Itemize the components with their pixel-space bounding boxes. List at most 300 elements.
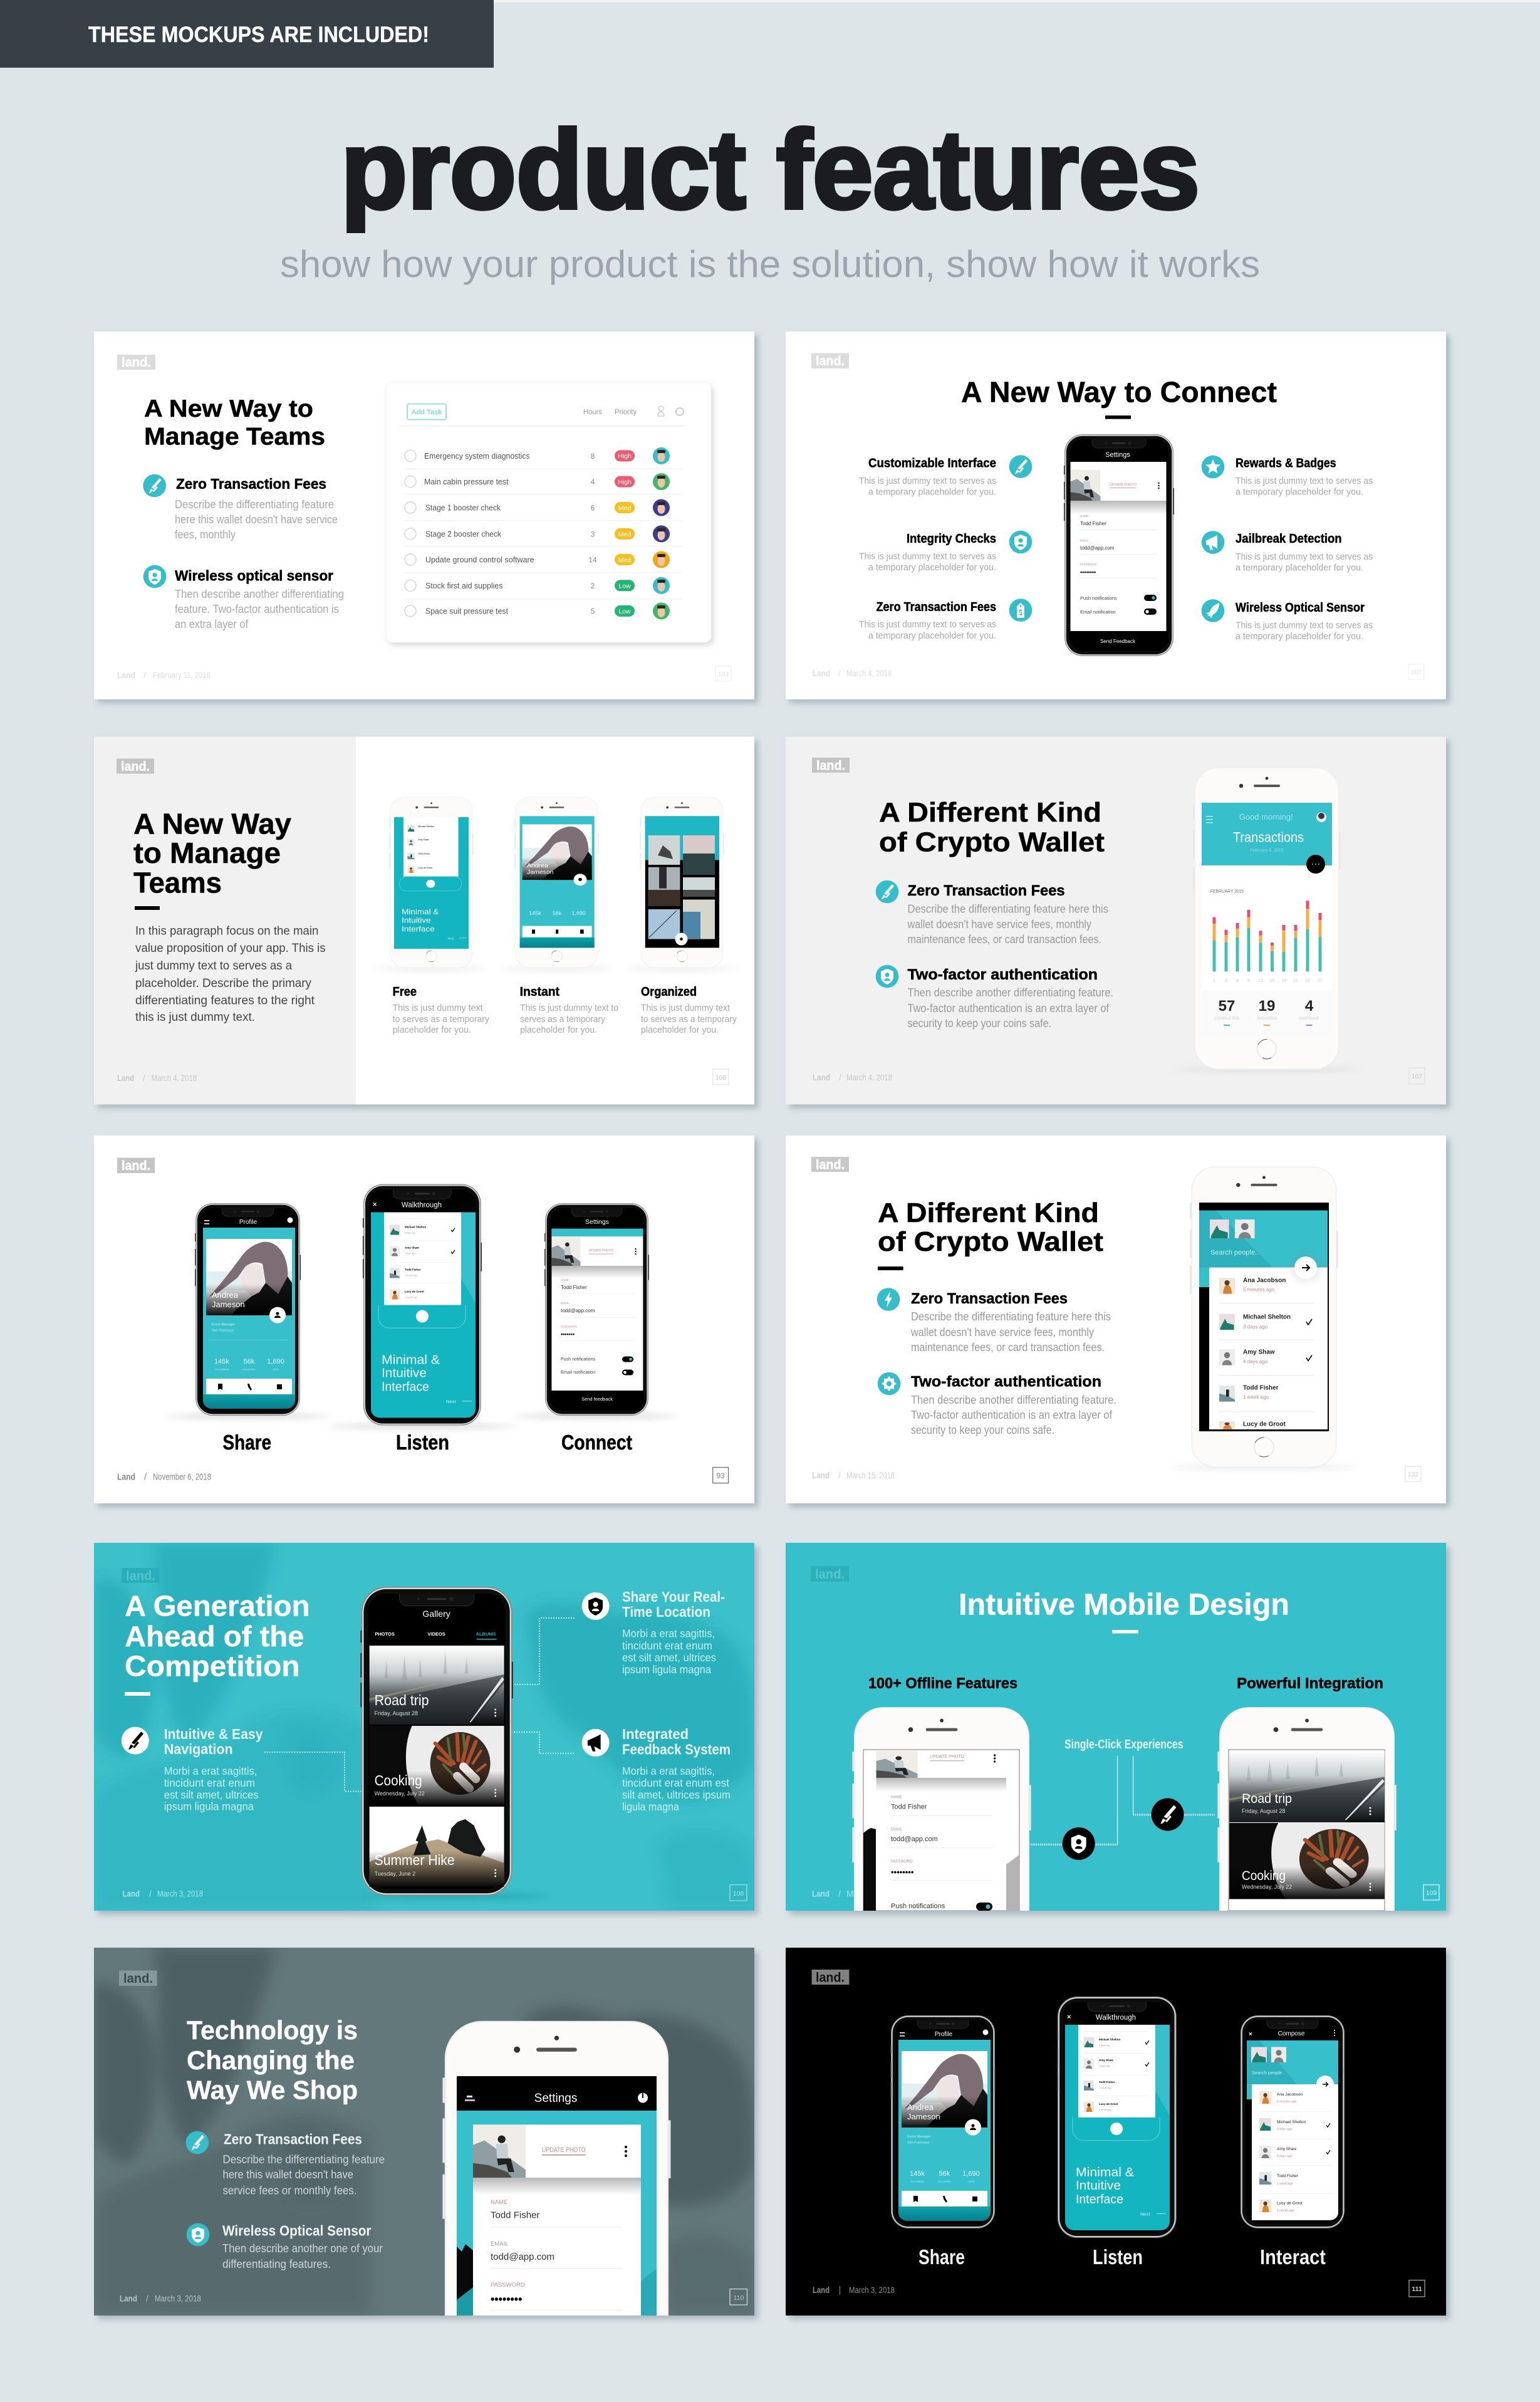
feature: zero transaction fees: maintenance fees, or card transaction fees. xyxy=(911,1341,1105,1354)
heading: to Manage xyxy=(133,837,281,869)
phone: profile: FOLLOWERS xyxy=(910,2181,925,2183)
phone: compose: × xyxy=(1249,2031,1252,2038)
bar chart: 15 xyxy=(1270,979,1274,983)
task rows: High xyxy=(618,479,632,486)
right features: This is just dummy text to serves as xyxy=(1236,552,1373,562)
panel: slide 2 a new way to connect xyxy=(786,332,1450,703)
phone: settings: Settings xyxy=(1105,451,1130,459)
phone: profile: Profile xyxy=(935,2031,953,2038)
feature: share your real-time location xyxy=(582,1589,725,1676)
feature: integrated feedback system xyxy=(582,1726,731,1813)
phone: gallery: ALBUMS xyxy=(476,1631,496,1637)
phone shadows xyxy=(166,1414,678,1428)
feature: zero transaction fees xyxy=(877,1288,1111,1354)
phone: walkthrough: 4 days ago xyxy=(1099,2065,1110,2067)
panel: slide 7 a generation ahead xyxy=(94,1543,758,1915)
feature labels: Share xyxy=(918,2245,965,2269)
left features: a temporary placeholder for you. xyxy=(868,563,996,573)
heading: A New Way to xyxy=(144,395,313,422)
phone: settings: Email notification xyxy=(1080,609,1116,615)
feature: integrated feedback system: tincidunt erat enum est xyxy=(622,1777,729,1789)
phone: compose: 4 days ago xyxy=(1277,2154,1293,2158)
right features: a temporary placeholder for you. xyxy=(1236,563,1363,573)
feature: two-factor authentication: Two-factor authentication xyxy=(911,1374,1101,1390)
phone: instant: Jameson xyxy=(527,869,554,876)
feature: share your real-time location: tincidunt erat enum xyxy=(622,1639,712,1652)
badge: these mockups are included xyxy=(0,0,494,68)
phone: walkthrough: Michael Shelton xyxy=(1099,2038,1121,2041)
column headings: Powerful Integration xyxy=(1237,1675,1383,1692)
feature labels: This is just dummy text xyxy=(393,1003,482,1013)
heading: of Crypto Wallet xyxy=(879,827,1105,857)
footer: Land xyxy=(117,1471,135,1483)
feature: zero transaction fees: Zero Transaction Fees xyxy=(224,2131,362,2147)
feature labels: Connect xyxy=(561,1431,632,1454)
heading: A Different Kind xyxy=(879,797,1101,828)
title: product features xyxy=(341,107,1200,232)
phone: profile: 1,690 xyxy=(267,1358,284,1365)
logo: land. xyxy=(123,1971,153,1986)
phone: transactions chart: FEBRUARY 2015 xyxy=(1210,889,1244,894)
bar chart: 1 xyxy=(1213,979,1215,983)
panel: slide 5 share listen connect xyxy=(94,1136,758,1507)
footer left: Land xyxy=(812,1889,830,1899)
heading xyxy=(879,797,1105,857)
feature: two-factor authentication: Two-factor authentication xyxy=(907,966,1098,983)
phone: settings: •••••••• xyxy=(1080,569,1096,575)
task rows: Med xyxy=(618,531,631,538)
phone: compose: Amy Shaw xyxy=(1277,2147,1296,2151)
heading: Intuitive Mobile Design xyxy=(959,1588,1289,1622)
single-click experiences label: Single-Click Experiences xyxy=(1064,1738,1184,1752)
heading: Technology is xyxy=(187,2015,358,2045)
top edge strip xyxy=(0,0,1540,3)
phone: gallery: Road trip xyxy=(1242,1792,1292,1806)
phone: profile: Andrea xyxy=(907,2102,934,2112)
footer: / xyxy=(838,1470,841,1480)
footer: 107 xyxy=(1411,669,1422,676)
heading xyxy=(878,1198,1103,1270)
bar chart: 24 xyxy=(1305,979,1310,983)
logo: land. xyxy=(816,354,845,368)
heading: A Different Kind xyxy=(878,1198,1099,1228)
phone: instant xyxy=(514,797,599,968)
phone: walkthrough: 1 month ago xyxy=(1099,2087,1111,2089)
phone: settings: EMAIL xyxy=(1080,539,1089,542)
feature: zero transaction fees xyxy=(876,880,1108,946)
heading: Ahead of the xyxy=(125,1620,304,1653)
phone: settings xyxy=(442,2020,670,2316)
phone: walkthrough: Next xyxy=(446,1399,456,1404)
feature labels: Free xyxy=(393,985,417,999)
phone: profile: 1,690 xyxy=(962,2170,980,2178)
task rows: Space suit pressure test xyxy=(425,607,508,615)
task rows: 3 xyxy=(591,530,595,539)
feature: zero transaction fees: Zero Transaction Fees xyxy=(907,882,1065,899)
feature: intuitive & easy navigation: Navigation xyxy=(164,1741,233,1757)
phone: walkthrough xyxy=(1057,1997,1177,2238)
table header: Priority xyxy=(615,407,637,416)
phone: settings: Todd Fisher xyxy=(891,1804,927,1811)
phone: walkthrough: Amy Shaw xyxy=(405,1246,419,1250)
footer: / xyxy=(146,2294,148,2304)
phone: profile: FOLLOWERS xyxy=(215,1369,229,1371)
phone: transactions chart: February 6, 2015 xyxy=(1250,849,1284,853)
footer: 103 xyxy=(718,671,729,678)
phone: settings: todd@app.com xyxy=(891,1835,938,1843)
right features: a temporary placeholder for you. xyxy=(1236,632,1363,642)
feature: intuitive & easy navigation: Intuitive & Easy xyxy=(164,1726,263,1742)
phone: compose: 1 week ago xyxy=(1243,1394,1269,1400)
phone: compose: Todd Fisher xyxy=(1243,1385,1279,1391)
phone: profile: 145k xyxy=(214,1358,229,1365)
footer: March 3, 2018 xyxy=(157,1889,203,1899)
connector: left xyxy=(1031,1756,1118,1860)
phone: compose: 5 minutes ago xyxy=(1277,2100,1297,2104)
add task button xyxy=(407,404,446,420)
right features xyxy=(1202,456,1373,642)
task card xyxy=(386,382,714,645)
phone: settings: Todd Fisher xyxy=(561,1285,587,1290)
phone: settings: Settings xyxy=(585,1218,609,1226)
feature: zero transaction fees: Describe the differentiating feature here this xyxy=(907,902,1108,915)
phone: walkthrough: 5 days ago xyxy=(1099,2044,1110,2047)
page number xyxy=(1423,1885,1439,1900)
phone: instant: 1,690 xyxy=(571,911,586,916)
stats: SNOOZED xyxy=(1257,1016,1277,1021)
feature: zero transaction fees: Describe the differentiating feature here this xyxy=(911,1310,1111,1323)
phone: settings: Email notification xyxy=(561,1369,595,1375)
phone: profile: Event Manager xyxy=(907,2135,930,2139)
phone: profile: Jameson xyxy=(212,1300,245,1309)
feature: two-factor authentication: security to keep your coins safe. xyxy=(907,1017,1051,1030)
phone: compose: Search people.. xyxy=(1252,2070,1285,2076)
feature: wireless optical sensor xyxy=(187,2222,383,2270)
phone: free: Minimal & xyxy=(402,907,439,916)
phone: gallery: Summer Hike xyxy=(375,1852,455,1868)
phone: walkthrough: 1 month ago xyxy=(405,1296,417,1298)
phone: settings: EMAIL xyxy=(561,1302,570,1305)
phone: transactions chart: Transactions xyxy=(1233,830,1304,845)
footer: / xyxy=(839,1072,841,1082)
bar chart: 3 xyxy=(1225,979,1227,983)
phone: walkthrough: Amy Shaw xyxy=(1099,2059,1113,2062)
feature: zero transaction fees: wallet doesn't have service fees, monthly xyxy=(907,918,1091,931)
phone: free: Amy Shaw xyxy=(418,838,429,841)
phone: free: Lucy de Groot xyxy=(418,867,432,869)
phone: settings: Settings xyxy=(534,2092,577,2105)
phone: profile xyxy=(195,1203,301,1416)
feature labels: This is just dummy text xyxy=(641,1003,730,1013)
footer: November 6, 2018 xyxy=(153,1471,211,1483)
bar chart: 27 xyxy=(1318,979,1323,983)
column headings xyxy=(868,1675,1383,1692)
phone: settings: Push notifications xyxy=(891,1903,945,1910)
feature: share your real-time location: est silt amet, ultrices xyxy=(622,1651,716,1664)
footer: 107 xyxy=(1412,1073,1422,1080)
footer: March 15, 2018 xyxy=(846,1470,895,1480)
feature: two-factor authentication: Then describe another differentiating feature. xyxy=(911,1394,1116,1406)
phone: walkthrough: Minimal & xyxy=(1076,2166,1135,2180)
feature: two-factor authentication: Two-factor authentication is an extra layer of xyxy=(911,1409,1113,1421)
connector: right xyxy=(1133,1756,1215,1831)
feature: wireless optical sensor: Then describe another one of your xyxy=(222,2242,383,2255)
footer: Land xyxy=(812,1470,830,1480)
feature labels: serves as a temporary xyxy=(520,1015,606,1025)
panel: slide 4 crypto wallet transactions xyxy=(786,737,1450,1108)
footer: 110 xyxy=(734,2294,744,2302)
logo: land. xyxy=(816,1970,845,1985)
phone: compose: Ana Jacobson xyxy=(1243,1277,1286,1284)
footer xyxy=(117,1468,729,1483)
feature: intuitive & easy navigation: tincidunt erat enum xyxy=(164,1777,255,1789)
table header: Hours xyxy=(583,407,602,416)
footer: March 4, 2018 xyxy=(152,1073,197,1083)
phone: walkthrough: Intuitive xyxy=(382,1366,427,1380)
phone: profile: FOLLOWING xyxy=(242,1369,256,1371)
task rows: 2 xyxy=(591,582,595,590)
phone: compose: Ana Jacobson xyxy=(1277,2092,1303,2097)
heading: Teams xyxy=(133,867,222,899)
feature: share your real-time location: Share Your Real- xyxy=(622,1589,725,1605)
feature: integrated feedback system: Integrated xyxy=(622,1726,689,1742)
task rows: Low xyxy=(618,608,631,615)
phone: instant: 145k xyxy=(529,911,541,916)
feature: zero transaction fees: Zero Transaction Fees xyxy=(176,476,326,492)
task rows: 4 xyxy=(591,478,595,486)
phone: compose xyxy=(1170,1167,1358,1468)
phone: walkthrough: Next xyxy=(1140,2211,1150,2217)
task rows: Med xyxy=(618,556,631,564)
footer left: / xyxy=(838,1889,841,1899)
feature labels: This is just dummy text to xyxy=(520,1003,618,1013)
feature: wireless optical sensor: differentiating features. xyxy=(222,2258,331,2270)
paragraph: just dummy text to serves as a xyxy=(135,959,292,973)
phone: settings xyxy=(544,1203,649,1416)
heading: A New Way to Connect xyxy=(961,375,1277,408)
phone: gallery xyxy=(1217,1707,1397,1911)
phone: walkthrough: Intuitive xyxy=(1076,2179,1121,2193)
bar chart: 4 xyxy=(1236,979,1239,983)
phone: settings: Todd Fisher xyxy=(491,2210,539,2220)
phone: profile: LIKES xyxy=(968,2181,975,2183)
add task button: Add Task xyxy=(412,409,442,416)
phone: profile: 145k xyxy=(910,2170,925,2178)
heading xyxy=(187,2015,358,2104)
bar chart: 21 xyxy=(1293,979,1298,983)
phone: compose: Lucy de Groot xyxy=(1243,1421,1286,1428)
panel: slide 9 technology is changing xyxy=(94,1948,761,2322)
phone: settings: PASSWORD xyxy=(561,1325,578,1329)
feature: wireless optical sensor: feature. Two-factor authentication is xyxy=(175,603,339,615)
feature labels: Instant xyxy=(520,985,559,999)
phone: profile: San Francisco xyxy=(212,1329,234,1332)
feature: intuitive & easy navigation: Morbi a erat sagittis, xyxy=(164,1765,257,1777)
left features: a temporary placeholder for you. xyxy=(868,488,996,498)
feature labels: Share xyxy=(223,1431,271,1454)
phone: settings: NAME xyxy=(491,2199,507,2206)
feature: intuitive & easy navigation: ipsum ligula magna xyxy=(164,1800,254,1812)
phone: walkthrough: Todd Fisher xyxy=(405,1268,421,1271)
heading xyxy=(125,1589,310,1696)
feature: two-factor authentication xyxy=(878,1372,1116,1436)
paragraph xyxy=(135,924,326,1024)
phone: gallery: Gallery xyxy=(422,1609,450,1619)
phone: profile: Jameson xyxy=(907,2112,940,2121)
phone: settings: NAME xyxy=(891,1796,902,1800)
footer: Land xyxy=(813,668,830,678)
footer: 108 xyxy=(733,1890,744,1898)
phone: settings xyxy=(852,1707,1031,1911)
task rows xyxy=(404,447,682,619)
stats xyxy=(1202,990,1332,1035)
footer xyxy=(117,1069,729,1085)
phone: transactions chart xyxy=(1173,768,1361,1071)
phone: settings: todd@app.com xyxy=(491,2252,554,2262)
paragraph: this is just dummy text. xyxy=(135,1010,255,1024)
right features: a temporary placeholder for you. xyxy=(1236,488,1363,498)
phone: walkthrough: Todd Fisher xyxy=(1099,2081,1115,2084)
phone: settings: PASSWORD xyxy=(891,1860,913,1864)
right features: This is just dummy text to serves as xyxy=(1236,476,1373,486)
task rows: Stage 1 booster check xyxy=(425,503,501,513)
feature: two-factor authentication: Then describe another differentiating feature. xyxy=(907,986,1113,999)
phone: walkthrough: Interface xyxy=(382,1380,429,1394)
feature labels: to serves as a temporary xyxy=(641,1015,737,1025)
phone: settings: ••••••• xyxy=(561,1331,575,1337)
phone: free: Interface xyxy=(402,924,435,933)
footer: 106 xyxy=(715,1074,726,1082)
phone: gallery: Road trip xyxy=(375,1692,429,1708)
footer: / xyxy=(838,668,841,678)
footer: Land xyxy=(813,2285,830,2295)
phone: free: Intuitive xyxy=(402,916,431,924)
feature: share your real-time location: Morbi a erat sagittis, xyxy=(622,1627,715,1640)
footer: March 4, 2018 xyxy=(846,668,892,678)
feature: zero transaction fees: Describe the differentiating feature xyxy=(223,2153,385,2166)
phone: instant: Andrea xyxy=(527,862,548,869)
phone: settings: •••••••• xyxy=(491,2293,522,2305)
phone: compose: 3 days ago xyxy=(1277,2128,1293,2131)
phone: compose: Amy Shaw xyxy=(1243,1349,1275,1356)
footer: February 11, 2018 xyxy=(153,670,211,680)
left features: Zero Transaction Fees xyxy=(876,600,996,614)
phone: settings: UPDATE PHOTO xyxy=(1110,483,1137,487)
phone: settings: UPDATE PHOTO xyxy=(930,1755,965,1759)
feature labels xyxy=(393,985,737,1035)
heading xyxy=(144,395,325,450)
footer xyxy=(813,664,1424,679)
subtitle: show how your product is the solution, show how it works xyxy=(280,243,1260,285)
footer: / xyxy=(143,670,146,680)
feature labels: to serves as a temporary xyxy=(393,1015,490,1025)
phone: instant: 56k xyxy=(553,911,562,916)
phone: compose: Michael Shelton xyxy=(1243,1314,1291,1321)
phone: walkthrough: 4 days ago xyxy=(405,1252,416,1255)
feature: wireless optical sensor: Wireless Optical Sensor xyxy=(222,2222,372,2238)
heading: A Generation xyxy=(125,1589,310,1622)
panel: slide 8 intuitive mobile design xyxy=(786,1543,1453,1918)
task rows: High xyxy=(618,452,632,460)
feature labels: placeholder for you. xyxy=(641,1025,719,1035)
phone: compose: Michael Shelton xyxy=(1277,2120,1306,2124)
phone: gallery: Friday, August 28 xyxy=(1242,1808,1285,1814)
task rows: Stage 2 booster check xyxy=(425,529,501,539)
footer xyxy=(812,1466,1421,1481)
phone: profile: San Francisco xyxy=(907,2141,929,2144)
table header xyxy=(583,406,684,416)
task rows: Low xyxy=(618,583,631,590)
feature: zero transaction fees: Zero Transaction Fees xyxy=(911,1290,1068,1307)
footer xyxy=(120,2289,747,2305)
stats: 57 xyxy=(1219,998,1235,1015)
phone: settings: PASSWORD xyxy=(491,2282,525,2289)
logo: land. xyxy=(121,760,150,774)
left features: This is just dummy text to serves as xyxy=(859,551,996,561)
left features: This is just dummy text to serves as xyxy=(859,620,996,630)
panel: slide 3 a new way to manage teams xyxy=(94,737,758,1108)
footer: / xyxy=(144,1471,147,1483)
feature: intuitive & easy navigation: est silt amet, ultrices xyxy=(164,1788,259,1801)
phone: walkthrough: × xyxy=(1067,2013,1071,2021)
phone: compose: 5 minutes ago xyxy=(1243,1287,1275,1293)
phone: walkthrough: 1 month ago xyxy=(405,1275,417,1277)
left features: Customizable Interface xyxy=(868,457,996,471)
bar chart: 9 xyxy=(1247,979,1250,983)
phone: settings: Todd Fisher xyxy=(1080,521,1106,526)
phone: organized xyxy=(640,797,724,968)
feature labels: placeholder for you. xyxy=(520,1025,597,1035)
feature: integrated feedback system: silt amet, ultrices ipsum xyxy=(622,1788,731,1801)
footer left: March 3, 2018 xyxy=(846,1889,903,1899)
phone: settings: EMAIL xyxy=(891,1828,903,1832)
footer: 111 xyxy=(1412,2285,1422,2293)
badge: these mockups are included: THESE MOCKUPS ARE INCLUDED! xyxy=(88,23,429,47)
phone: compose: 1 month ago xyxy=(1277,2209,1294,2213)
heading: Competition xyxy=(125,1649,299,1682)
phone: compose: 4 days ago xyxy=(1243,1359,1268,1365)
feature: wireless optical sensor: an extra layer of xyxy=(175,618,249,630)
phone: walkthrough: Interface xyxy=(1076,2193,1123,2206)
phone: settings: UPDATE PHOTO xyxy=(589,1249,614,1253)
footer: Land xyxy=(123,1889,140,1899)
phone: settings: Send feedback xyxy=(581,1396,613,1402)
feature: share your real-time location: Time Location xyxy=(622,1604,710,1620)
panel: slide 10 share listen interact xyxy=(786,1948,1450,2319)
heading: of Crypto Wallet xyxy=(878,1226,1103,1257)
phone: free xyxy=(389,797,474,968)
panel: slide 6 crypto wallet compose xyxy=(786,1136,1450,1507)
bar chart: 19 xyxy=(1281,979,1286,983)
feature labels: Listen xyxy=(396,1431,449,1454)
phone: settings: EMAIL xyxy=(491,2240,509,2247)
footer xyxy=(813,2280,1425,2297)
phone: profile: LIKES xyxy=(273,1369,279,1371)
footer: Land xyxy=(117,1073,134,1083)
right features: Jailbreak Detection xyxy=(1236,532,1342,546)
bar chart xyxy=(1213,901,1323,983)
right features: This is just dummy text to serves as xyxy=(1236,620,1373,630)
task rows: Emergency system diagnostics xyxy=(424,451,530,461)
feature: two-factor authentication: Two-factor authentication is an extra layer of xyxy=(907,1002,1110,1015)
task rows: 8 xyxy=(591,452,595,461)
phone: free: Todd Fisher xyxy=(418,853,430,855)
phone: gallery: Cooking xyxy=(375,1772,422,1788)
phone: settings: todd@app.com xyxy=(1080,545,1115,551)
feature: intuitive & easy navigation xyxy=(122,1726,263,1812)
stats: OVERDUE xyxy=(1299,1016,1319,1021)
feature: zero transaction fees: service fees or monthly fees. xyxy=(223,2185,357,2197)
